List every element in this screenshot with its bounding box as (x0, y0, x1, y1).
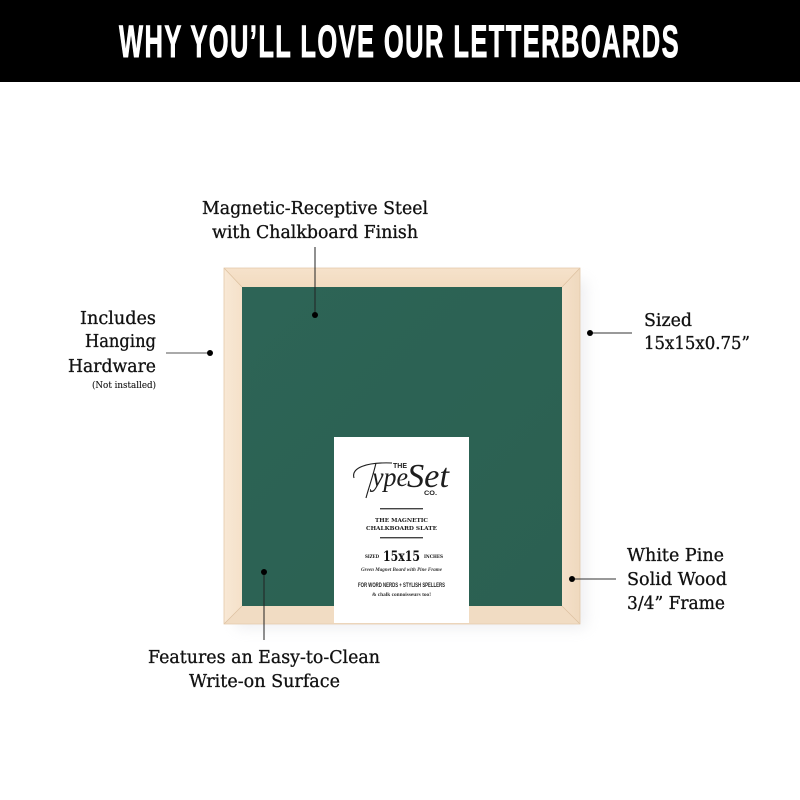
callout: steel finish: with Chalkboard Finish (212, 223, 418, 243)
logo: Set (407, 458, 451, 495)
logo: THE (393, 461, 407, 470)
callout: write-on surface: Write-on Surface (189, 672, 340, 692)
callout: write-on surface (148, 569, 380, 692)
callout: steel finish: Magnetic-Receptive Steel (202, 199, 428, 219)
logo: ype (369, 462, 408, 492)
card size (365, 549, 444, 565)
card product name: CHALKBOARD SLATE (366, 526, 437, 532)
card size: 15x15 (383, 549, 420, 565)
card audience: FOR WORD NERDS + STYLISH SPELLERS (358, 583, 445, 589)
callout: steel finish (202, 199, 428, 318)
card divider lines (380, 508, 423, 538)
card size: SIZED (365, 554, 379, 560)
callout: hanging hardware (68, 309, 213, 391)
logo: CO. (424, 490, 437, 497)
chalkboard surface (242, 287, 562, 606)
callout: white pine frame: White Pine (627, 546, 724, 566)
card product name: THE MAGNETIC (375, 518, 429, 524)
callout: size (587, 311, 750, 354)
callout: size: Sized (644, 311, 692, 331)
callout: white pine frame: Solid Wood (627, 570, 727, 590)
product card (334, 437, 469, 623)
letterboard (224, 268, 586, 628)
callout: size: 15x15x0.75” (644, 334, 750, 354)
callout: hanging hardware: Hardware (68, 357, 156, 377)
title banner (0, 0, 800, 82)
callout: write-on surface: Features an Easy-to-Clean (148, 648, 380, 668)
callout: hanging hardware: (Not installed) (92, 380, 156, 391)
callout: hanging hardware: Hanging (85, 332, 156, 352)
callout: white pine frame (569, 546, 727, 614)
card product name (366, 518, 437, 532)
callout: hanging hardware: Includes (80, 309, 156, 329)
card size: INCHES (424, 554, 444, 560)
logo (354, 458, 451, 498)
card description: Green Magnet Board with Pine Frame (361, 568, 443, 573)
callout: white pine frame: 3/4” Frame (627, 594, 725, 614)
card tagline: & chalk connoisseurs too! (372, 593, 431, 598)
